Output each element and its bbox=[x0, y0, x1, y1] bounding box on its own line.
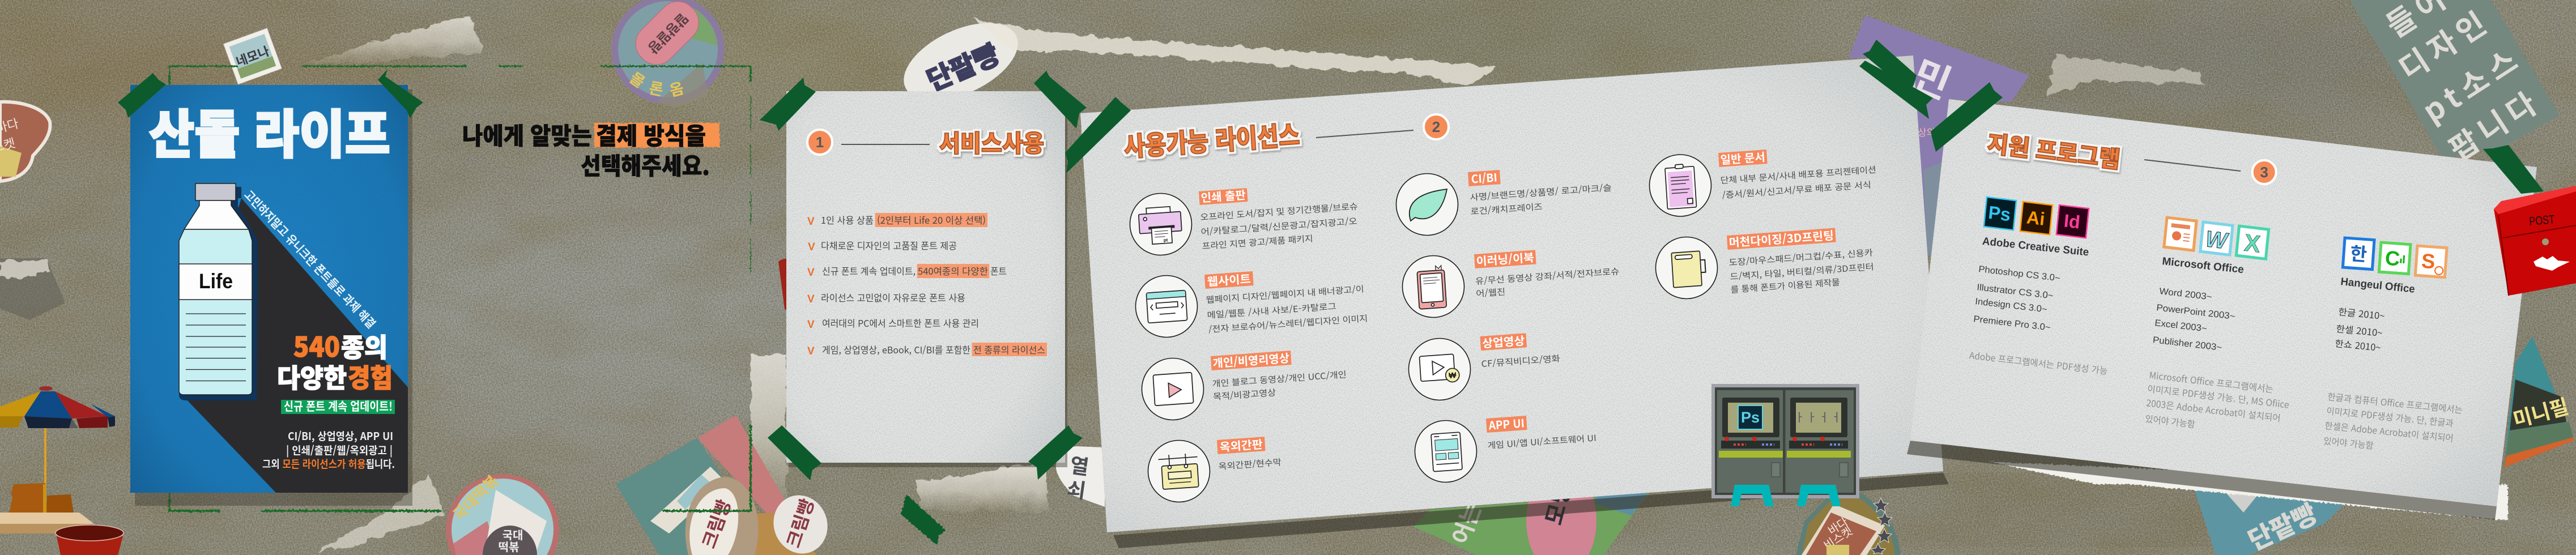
tag: 일반 문서 bbox=[1720, 148, 1766, 168]
green update banner: 신규 폰트 계속 업데이트! bbox=[284, 398, 393, 415]
number badge 1: 1 bbox=[816, 134, 824, 151]
icon: paid video: ₩ bbox=[1449, 370, 1457, 380]
arcade machines bbox=[1711, 384, 1859, 506]
heading: choose payment: 선택해주세요. bbox=[581, 147, 710, 182]
service list: V bbox=[807, 216, 815, 228]
note: 있어야 가능함 bbox=[2145, 411, 2196, 430]
description: 유/무선 동영상 강좌/서적/전자브로슈 bbox=[1475, 265, 1620, 287]
number badge 1 bbox=[807, 130, 832, 155]
poster: purple behind panel corner: 상의 bbox=[1918, 125, 1935, 139]
icon: tablet bbox=[1417, 266, 1446, 309]
item: 웹사이트 bbox=[1135, 270, 1368, 338]
heading: choose payment bbox=[462, 117, 719, 182]
green torn frame bbox=[169, 66, 751, 511]
service list: V bbox=[807, 345, 815, 357]
tape: poster left bbox=[118, 73, 166, 118]
icon: Ai bbox=[2020, 202, 2053, 234]
icon: paid video bbox=[1419, 354, 1460, 384]
description: 오프라인 도서/잡지 및 정기간행물/브로슈 bbox=[1200, 200, 1359, 223]
tag: 상업영상 bbox=[1481, 332, 1525, 351]
badge: 바다 비스켓: 바다 bbox=[1824, 513, 1851, 538]
description: 메일/웹툰 /사내 사보/E-카탈로그 bbox=[1207, 300, 1337, 321]
service list: 다채로운 디자인의 고품질 폰트 제공 bbox=[821, 238, 957, 252]
description: 로건/캐치프레이즈 bbox=[1470, 200, 1543, 217]
icon: Ps: Ps bbox=[1987, 202, 2012, 225]
panel: main poster 산돌 라이프 bbox=[130, 85, 408, 493]
sticker: 크림빵 oval bbox=[765, 488, 836, 555]
icon: Word: W bbox=[2204, 226, 2230, 254]
panel 2 title: 사용가능 라이선스 bbox=[1123, 114, 1301, 164]
description: 목적/비광고영상 bbox=[1212, 386, 1276, 403]
description: 게임 UI/앱 UI/소프트웨어 UI bbox=[1487, 432, 1596, 451]
stools bbox=[1731, 485, 1841, 506]
icon: PowerPoint bbox=[2164, 217, 2196, 250]
number badge 2 bbox=[1424, 114, 1449, 139]
sticker: 국대떡볶이 badge: 떡볶 bbox=[499, 538, 519, 554]
poster: 미니필: 미니필 bbox=[2509, 390, 2571, 433]
bottle bbox=[179, 183, 258, 400]
service list: 신규 폰트 계속 업데이트, bbox=[822, 264, 916, 278]
tape: panel 1 bottom right bbox=[1028, 425, 1083, 480]
panel 3 title: 지원 프로그램 bbox=[1986, 125, 2122, 174]
sticker: 몰론옴 badge bbox=[611, 0, 725, 108]
column: Adobe bbox=[1969, 197, 2108, 377]
note bbox=[2323, 389, 2463, 452]
tape: poster right bbox=[378, 69, 423, 118]
licence summary bbox=[262, 428, 395, 471]
machine left bbox=[1717, 390, 1783, 493]
service list: V bbox=[807, 293, 815, 305]
sticker: 크림빵 oval: 크림빵 bbox=[780, 495, 820, 550]
service list: 폰트 bbox=[990, 264, 1007, 278]
list: Illustrator CS 3.0~ bbox=[1977, 282, 2054, 301]
description: 프라인 지면 광고/제품 패키지 bbox=[1202, 232, 1313, 252]
description: CF/뮤직비디오/영화 bbox=[1481, 352, 1561, 370]
service list: 540여종의 다양한 bbox=[918, 264, 988, 278]
poster title: 산돌 라이프 bbox=[149, 93, 390, 168]
panel 1 shadow bbox=[789, 96, 1067, 467]
poster: 크림빵 bbox=[616, 415, 817, 555]
icon: mug bbox=[1671, 251, 1706, 288]
sticker: 열쇠: 열 bbox=[1068, 449, 1091, 481]
tag: 인쇄 출판 bbox=[1200, 186, 1246, 206]
list: 한쇼 2010~ bbox=[2335, 336, 2382, 354]
description: 어/카탈로그/달력/신문광고/잡지광고/오 bbox=[1200, 215, 1358, 238]
panel 1 title: 서비스사용 bbox=[939, 125, 1044, 159]
column: Microsoft bbox=[2145, 217, 2290, 430]
540종의 다양한 경험: 종의 bbox=[341, 327, 388, 365]
highlight bbox=[594, 123, 719, 147]
panel 3: 지원 프로그램 bbox=[1910, 99, 2537, 506]
icon: Ps bbox=[1984, 197, 2016, 230]
long shadow bbox=[182, 198, 408, 493]
list: Publisher 2003~ bbox=[2152, 335, 2222, 353]
description: 개인 블로그 동영상/개인 UCC/개인 bbox=[1212, 368, 1347, 390]
service list bbox=[807, 213, 1047, 357]
poster: 디자인 pt소스 팝니다 bbox=[2349, 0, 2560, 169]
description bbox=[1475, 265, 1620, 300]
poster: green behind panel two: 모닝 bbox=[1536, 479, 1578, 528]
list: Indesign CS 3.0~ bbox=[1975, 296, 2047, 315]
umbrella and table scene bbox=[0, 386, 124, 555]
icon: browser window bbox=[1146, 291, 1187, 323]
list: PowerPoint 2003~ bbox=[2156, 302, 2236, 322]
icon: Excel: X bbox=[2243, 229, 2262, 258]
service list: 여러대의 PC에서 스마트한 폰트 사용 관리 bbox=[822, 316, 979, 330]
red post box: POST bbox=[2528, 213, 2555, 228]
item: APP UI bbox=[1415, 414, 1596, 483]
icon: clipboard bbox=[1665, 164, 1697, 209]
note: Adobe 프로그램에서는 PDF생성 가능 bbox=[1969, 348, 2108, 377]
poster: 크림빵: 크림빵 bbox=[695, 496, 736, 552]
machine left: Ps bbox=[1741, 409, 1760, 426]
service list: 라이선스 고민없이 자유로운 폰트 사용 bbox=[821, 291, 965, 304]
tag: 웹사이트 bbox=[1207, 270, 1251, 289]
number badge 3: 3 bbox=[2260, 164, 2268, 181]
icon: post logo bbox=[2534, 256, 2570, 271]
description bbox=[1470, 181, 1612, 217]
icon: Id bbox=[2056, 205, 2089, 238]
sticker: 국대떡볶이 badge: 국대떡볶 bbox=[447, 469, 503, 525]
list bbox=[2152, 286, 2236, 353]
tape: panel 2 top left bbox=[1065, 97, 1131, 173]
sticker: 바다 비스켓 left bbox=[0, 102, 50, 181]
panel 1: 서비스사용 bbox=[786, 91, 1065, 463]
licence summary: 그외 모든 라이선스가 허용됩니다. bbox=[262, 456, 395, 471]
icon: Word bbox=[2200, 222, 2233, 255]
poster: purple behind panel corner bbox=[1849, 15, 2029, 255]
icon: app layout bbox=[1431, 432, 1462, 472]
tape: panel 1 top left bbox=[760, 78, 816, 131]
icon: Excel bbox=[2236, 226, 2268, 259]
note: 한글과 컴퓨터 Office 프로그램에서는 bbox=[2327, 389, 2463, 416]
description bbox=[1206, 283, 1368, 335]
description bbox=[1728, 246, 1874, 296]
540종의 다양한 경험 bbox=[277, 325, 393, 395]
icon: Id: Id bbox=[2063, 210, 2081, 233]
sticker: 네모나 bbox=[223, 28, 282, 84]
description: 드/벽지, 타일, 버티컬/의류/3D프린터 bbox=[1730, 261, 1874, 283]
tape: panel 2 top right bbox=[1859, 40, 1933, 119]
icon: leaf bbox=[1410, 189, 1447, 221]
note: 이미지로 PDF생성 가능. 단, 한글과 bbox=[2326, 403, 2454, 429]
note: 이미지로 PDF생성 가능. 단, MS Ofiice bbox=[2147, 381, 2290, 411]
service list: 전 종류의 라이선스 bbox=[973, 343, 1045, 356]
list: 한셀 2010~ bbox=[2336, 321, 2383, 339]
poster: purple behind panel corner: 민 bbox=[1905, 44, 1960, 110]
tape: panel 3 top left bbox=[1931, 82, 2003, 152]
heading: Hangeul Office bbox=[2340, 276, 2416, 296]
poster shadow bbox=[135, 89, 412, 506]
sticker: 열쇠 bbox=[1056, 446, 1105, 507]
540종의 다양한 경험: 540 bbox=[293, 325, 340, 365]
sticker: 단팥빵 bbox=[892, 7, 1030, 116]
description: 단체 내부 문서/사내 배포용 프리젠테이션 bbox=[1720, 164, 1876, 186]
icon: Cell: C bbox=[2385, 246, 2401, 270]
description: 어/웹진 bbox=[1476, 285, 1506, 300]
sticker: 몰론옴 badge: 론 bbox=[648, 75, 665, 100]
list bbox=[2335, 304, 2386, 354]
icon: Hangul: 한 bbox=[2349, 240, 2368, 267]
description bbox=[1212, 368, 1347, 403]
tag: 개인/비영리영상 bbox=[1212, 349, 1290, 371]
badge: 바다 비스켓 bbox=[1796, 483, 1901, 555]
poster: 디자인 pt소스 팝니다: 팝니다 bbox=[2439, 77, 2549, 169]
heading: choose payment: 결제 방식을 bbox=[596, 117, 706, 152]
description: /증서/원서/신고서/무료 배포 공문 서식 bbox=[1722, 178, 1871, 201]
service list: (2인부터 Life 20 이상 선택) bbox=[877, 213, 986, 227]
item: 인쇄 출판 bbox=[1130, 186, 1359, 255]
note bbox=[2145, 368, 2290, 430]
diagonal caption: 고민하지말고 유니크한 폰트들로 과제 해결 bbox=[241, 186, 380, 332]
service list: V bbox=[807, 267, 815, 279]
poster: 디자인 pt소스 팝니다: pt소스 bbox=[2413, 33, 2530, 131]
sticker: 국대떡볶이 badge: 국대 bbox=[503, 526, 523, 543]
item: 일반 문서 bbox=[1650, 148, 1876, 216]
description: 도장/마우스패드/머그컵/수표, 신용카 bbox=[1728, 246, 1874, 268]
heading: choose payment: 나에게 알맞는 bbox=[462, 117, 592, 152]
note: 2003은 Adobe Acrobat이 설치되어 bbox=[2146, 395, 2281, 424]
note: Microsoft Office 프로그램에서는 bbox=[2149, 368, 2274, 395]
icon: Cell bbox=[2379, 242, 2411, 274]
icon: Show bbox=[2415, 246, 2447, 278]
service list: V bbox=[807, 319, 815, 331]
540종의 다양한 경험: 경험 bbox=[348, 358, 393, 395]
item: CI/BI bbox=[1396, 168, 1612, 236]
tape: panel 1 bottom left bbox=[768, 425, 821, 480]
bottle: Life bbox=[199, 270, 233, 293]
panel 2: 사용가능 라이선스 bbox=[1080, 56, 1943, 532]
red post box bbox=[2494, 186, 2576, 296]
tag: 머천다이징/3D프린팅 bbox=[1728, 227, 1834, 250]
service list: 1인 사용 상품 bbox=[821, 213, 874, 227]
tape: loose bottom bbox=[901, 494, 946, 545]
description: 를 통해 폰트가 이용된 제작물 bbox=[1730, 276, 1841, 296]
tape: panel 1 top right bbox=[1034, 71, 1087, 129]
tag: 옥외간판 bbox=[1219, 435, 1263, 455]
sticker: 몰론옴 badge: 말랑말랑 bbox=[644, 10, 693, 59]
sticker: 단팥빵: 단팥빵 bbox=[919, 32, 1004, 98]
note: 있어야 가능함 bbox=[2323, 433, 2374, 452]
panel 3 back sheet bbox=[1989, 462, 2508, 520]
licence summary: CI/BI, 상업영상, APP UI bbox=[288, 428, 393, 443]
description: 사명/브랜드명/상품명/ 로고/마크/슬 bbox=[1470, 181, 1612, 203]
icon: Show: S bbox=[2421, 249, 2436, 273]
icon: video player bbox=[1153, 373, 1194, 405]
item: 옥외간판 bbox=[1148, 435, 1282, 502]
poster: 미니필 bbox=[2504, 336, 2574, 467]
description bbox=[1720, 164, 1876, 201]
machine right: ㅏㅏㅓㅓ bbox=[1794, 408, 1843, 425]
item: 머천다이징/3D프린팅 bbox=[1655, 227, 1874, 299]
sticker: 몰론옴 badge: 몰 bbox=[626, 66, 650, 92]
sticker: 네모나: 네모나 bbox=[233, 41, 272, 70]
list: Premiere Pro 3.0~ bbox=[1973, 314, 2051, 333]
licence summary: | 인쇄/출판/웹/옥외광고 | bbox=[286, 442, 393, 458]
machine right bbox=[1786, 390, 1854, 493]
description: 옥외간판/현수막 bbox=[1218, 456, 1282, 472]
red bucket behind panel one bbox=[778, 258, 790, 311]
sticker: 열쇠: 쇠 bbox=[1065, 473, 1088, 505]
icon: Hangul bbox=[2343, 238, 2374, 270]
icon: Ai: Ai bbox=[2026, 207, 2046, 229]
service list: V bbox=[808, 241, 815, 253]
heading: Microsoft Office bbox=[2162, 255, 2245, 276]
icon: signboard bbox=[1158, 453, 1199, 489]
description: /전자 브로슈어/뉴스레터/웹디자인 이미지 bbox=[1208, 312, 1368, 335]
panel 3 shadow bbox=[1907, 441, 2497, 520]
tape: mailbox bbox=[2483, 145, 2544, 194]
sticker: 국대떡볶이 badge bbox=[446, 469, 559, 555]
description: 웹페이지 디자인/웹페이지 내 배너광고/이 bbox=[1206, 283, 1364, 306]
item: 상업영상 bbox=[1408, 331, 1561, 400]
number badge 3 bbox=[2253, 160, 2276, 184]
icon: printer: pt bbox=[1164, 237, 1168, 243]
description bbox=[1200, 200, 1359, 252]
service list: 게임, 상업영상, eBook, CI/BI를 포함한 bbox=[822, 343, 970, 356]
list: Excel 2003~ bbox=[2155, 318, 2207, 334]
panel 2 shadow bbox=[1113, 473, 1949, 548]
note: 한셀은 Adobe Acrobat이 설치되어 bbox=[2324, 418, 2454, 445]
list: Photoshop CS 3.0~ bbox=[1978, 264, 2060, 284]
sticker: 몰론옴 badge: 옴 bbox=[667, 76, 686, 101]
list: Word 2003~ bbox=[2159, 286, 2212, 302]
540종의 다양한 경험: 다양한 bbox=[277, 358, 347, 395]
number badge 2: 2 bbox=[1432, 118, 1440, 135]
badge: 바다 비스켓: 비스켓 bbox=[1820, 522, 1855, 553]
tag: CI/BI bbox=[1471, 168, 1498, 187]
list: 한글 2010~ bbox=[2338, 304, 2386, 322]
column: Hangeul bbox=[2323, 238, 2463, 452]
tag: APP UI bbox=[1488, 414, 1525, 433]
poster: 단팥빵 teal bbox=[2190, 475, 2345, 555]
tag: 이러닝/이북 bbox=[1476, 249, 1535, 269]
poster paper bbox=[130, 85, 408, 493]
list bbox=[1973, 264, 2060, 333]
heading: Adobe Creative Suite bbox=[1982, 236, 2089, 259]
poster: green behind panel two bbox=[1413, 467, 1649, 555]
icon: printer bbox=[1138, 206, 1182, 245]
item: 이러닝/이북 bbox=[1403, 248, 1620, 317]
poster: green behind panel two: 어는 bbox=[1442, 498, 1488, 548]
item: 개인/비영리영상 bbox=[1142, 349, 1347, 420]
